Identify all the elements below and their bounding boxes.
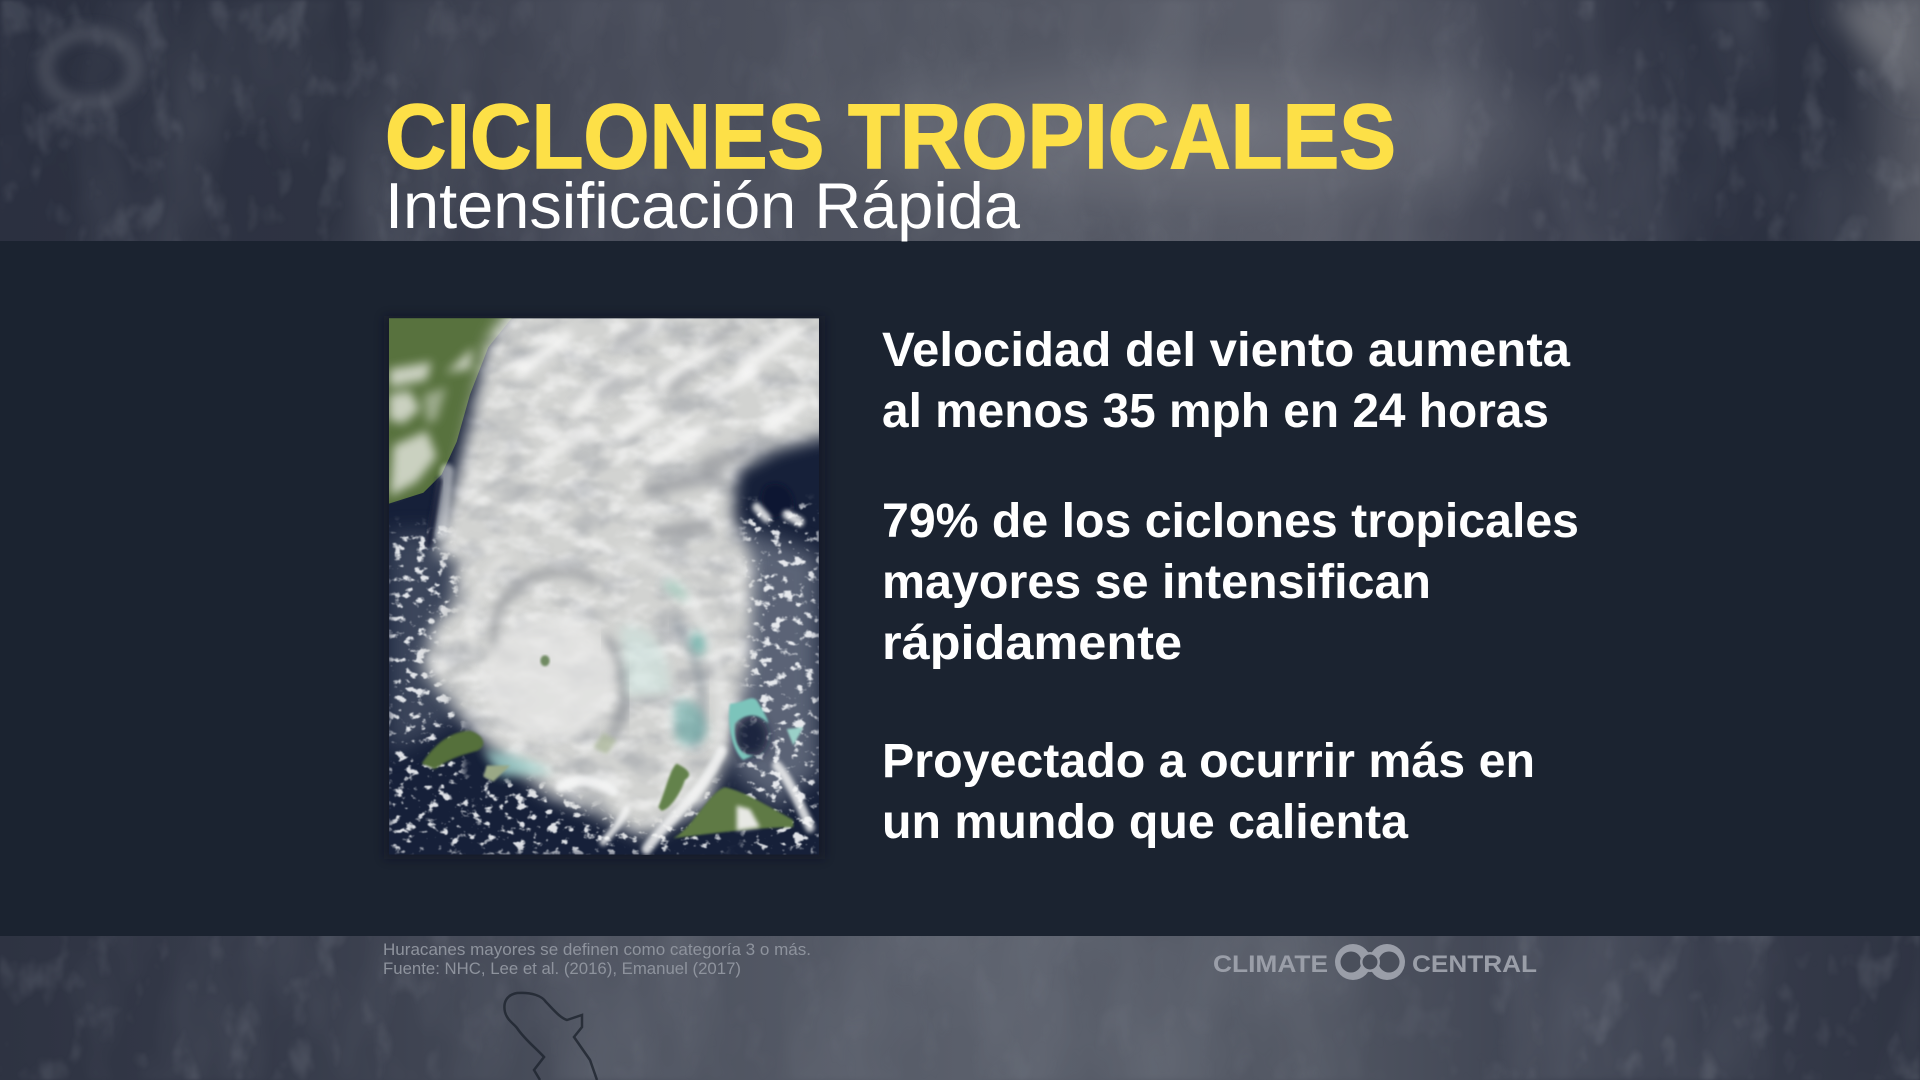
text block: warming world: un mundo que calienta <box>882 796 1408 849</box>
text block: 79 percent: rápidamente <box>882 617 1182 670</box>
subtitle: Intensificación Rápida <box>385 169 1021 242</box>
logo: Climate Central: CLIMATE <box>1213 951 1328 978</box>
footnote: definition and sources: Fuente: NHC, Lee et al. (2016), Emanuel (2017) <box>383 959 741 978</box>
footnote: definition and sources: Huracanes mayores se definen como categoría 3 o más. <box>383 940 811 959</box>
text block: warming world: Proyectado a ocurrir más en <box>882 735 1535 788</box>
white cloud streaks <box>440 471 810 849</box>
spiral bands <box>471 551 722 751</box>
text block: wind speed: al menos 35 mph en 24 horas <box>882 385 1549 438</box>
turquoise shallows <box>483 580 707 776</box>
footnote: definition and sources <box>383 940 811 978</box>
dark gap east of storm <box>762 484 794 518</box>
hurricane eye <box>540 655 550 666</box>
text block: 79 percent <box>882 495 1579 670</box>
title: CICLONES TROPICALES <box>385 86 1396 188</box>
dark basin inside shallows <box>735 716 768 756</box>
hurricane cloud mass <box>389 318 819 855</box>
speckled cloud <box>389 496 819 854</box>
text block: wind speed: Velocidad del viento aumenta <box>882 324 1570 377</box>
text block: warming world <box>882 735 1535 849</box>
text block: 79 percent: 79% de los ciclones tropicales <box>882 495 1579 548</box>
text block: 79 percent: mayores se intensifican <box>882 556 1431 609</box>
background: coastline outline <box>504 993 597 1080</box>
dark shadow line on storm edge <box>428 478 440 547</box>
logo: Climate Central <box>1213 944 1537 980</box>
dark content band <box>0 241 1920 936</box>
haze over western ocean <box>389 533 460 755</box>
text block: wind speed <box>882 324 1570 438</box>
logo: Climate Central: CENTRAL <box>1412 951 1537 978</box>
land: Yucatan and Cuba <box>422 731 483 769</box>
land cloud patches <box>389 347 473 496</box>
upper cloud streaks <box>520 325 803 460</box>
land: southeast coast <box>389 318 512 504</box>
Bahamas shallows <box>729 698 768 760</box>
satellite photo: hurricane <box>384 316 825 859</box>
ocean <box>389 318 819 855</box>
haze over eastern ocean <box>733 525 819 809</box>
